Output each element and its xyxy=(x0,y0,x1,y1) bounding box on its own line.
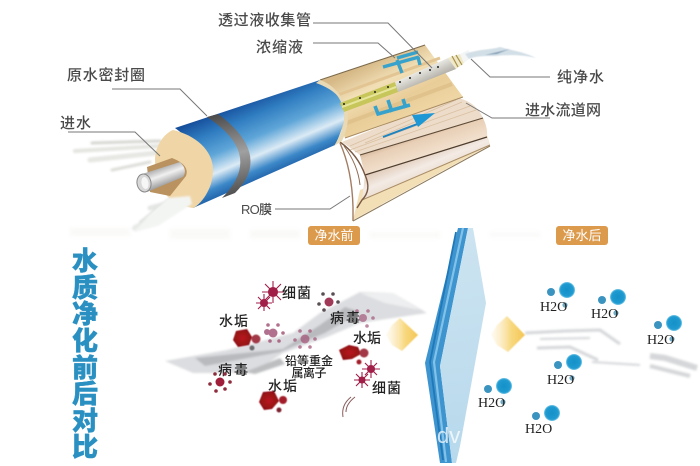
pale virus cluster 1 xyxy=(264,323,285,343)
vertical heading: 质 xyxy=(72,273,98,303)
bacteria cluster right xyxy=(354,360,380,388)
central tube xyxy=(136,158,187,196)
label: 进水: 进水 xyxy=(60,115,91,132)
tag: 净水前: 净水前 xyxy=(314,228,354,243)
scale rock right xyxy=(339,345,368,364)
tag: 净水后 xyxy=(556,226,608,245)
blue flow arrow: middle xyxy=(375,99,410,114)
faint residual background texture xyxy=(70,228,540,239)
bottom tan sheet xyxy=(353,135,490,220)
molecule 5: H2O xyxy=(478,396,505,411)
label: RO膜: RO膜 xyxy=(241,202,272,217)
water molecules xyxy=(478,282,682,437)
label: 铅等重金属离子: 铅等重金 xyxy=(285,353,333,368)
molecule 6: H2O xyxy=(525,422,552,437)
water spray: inlet left xyxy=(75,141,182,228)
molecule 3: H2O xyxy=(647,333,674,348)
sheet edge lines xyxy=(340,118,490,221)
molecule 2 xyxy=(591,289,626,322)
feed channel mesh layer xyxy=(342,97,483,155)
outer seal band xyxy=(207,114,251,198)
swoosh mark xyxy=(343,397,355,417)
water spray: pure water outlet xyxy=(465,47,536,59)
dirty water stream xyxy=(165,292,427,374)
vertical heading xyxy=(72,246,98,462)
vertical heading: 水 xyxy=(72,246,98,276)
molecule 4: H2O xyxy=(547,373,574,388)
pale virus cluster 2 xyxy=(293,329,317,349)
bacteria cluster top xyxy=(256,281,284,311)
vertical heading: 前 xyxy=(72,353,98,383)
tag: 净水后: 净水后 xyxy=(562,228,602,243)
pale virus cluster behind label xyxy=(355,309,375,328)
label: 病毒 left: 病毒 xyxy=(218,362,248,378)
blue flow arrow: lower xyxy=(383,113,435,137)
contaminants group: 属离子 xyxy=(292,365,326,380)
vertical heading: 后 xyxy=(72,379,98,409)
label: 病毒 top: 病毒 xyxy=(330,310,360,326)
end cap xyxy=(155,130,213,208)
water jet over end cap xyxy=(134,196,192,232)
vertical heading: 对 xyxy=(72,406,98,436)
virus cluster lower left xyxy=(208,372,232,393)
label: 水垢 right: 水垢 xyxy=(353,330,381,346)
watermark text on membrane: dv xyxy=(437,423,460,448)
lower sheet layer xyxy=(362,137,490,200)
label: 原水密封圈: 原水密封圈 xyxy=(67,66,145,84)
molecule 4 xyxy=(547,354,582,388)
label: 细菌 top: 细菌 xyxy=(282,285,311,301)
filtration membrane sheet xyxy=(425,228,486,463)
label: 水垢 left: 水垢 xyxy=(219,313,248,329)
yellow arrow: after membrane xyxy=(491,316,525,352)
RO membrane element illustration xyxy=(75,45,536,232)
blue flow arrow: upper xyxy=(383,52,420,73)
label: 细菌 right: 细菌 xyxy=(372,380,401,396)
tag: 净水前 xyxy=(308,226,360,245)
scale rock left xyxy=(233,329,260,350)
molecule 3 xyxy=(647,315,682,348)
contaminants group xyxy=(208,281,401,417)
label: 浓缩液: 浓缩液 xyxy=(256,39,303,56)
label: 纯净水: 纯净水 xyxy=(557,69,604,86)
pure water stream xyxy=(525,330,697,376)
molecule 2: H2O xyxy=(591,307,618,322)
virus cluster top right xyxy=(317,292,340,312)
vertical heading: 比 xyxy=(72,432,98,462)
vertical heading: 净 xyxy=(72,299,98,329)
leader lines xyxy=(68,23,550,209)
label: 水垢 lower: 水垢 xyxy=(268,378,297,394)
molecule 6 xyxy=(525,405,560,437)
top tan sheet xyxy=(320,45,463,138)
blue cylinder body xyxy=(175,80,344,208)
vertical heading: 化 xyxy=(72,326,98,356)
label: 进水流道网: 进水流道网 xyxy=(525,101,601,119)
yellow arrow: before membrane xyxy=(386,318,418,351)
molecule 1: H2O xyxy=(540,300,567,315)
permeate collection pipe xyxy=(340,50,473,112)
scale rock lower xyxy=(259,391,287,412)
middle sheet layer xyxy=(360,118,487,175)
molecule 5 xyxy=(478,378,512,411)
molecule 1 xyxy=(540,282,575,315)
label: 透过液收集管: 透过液收集管 xyxy=(218,11,311,29)
